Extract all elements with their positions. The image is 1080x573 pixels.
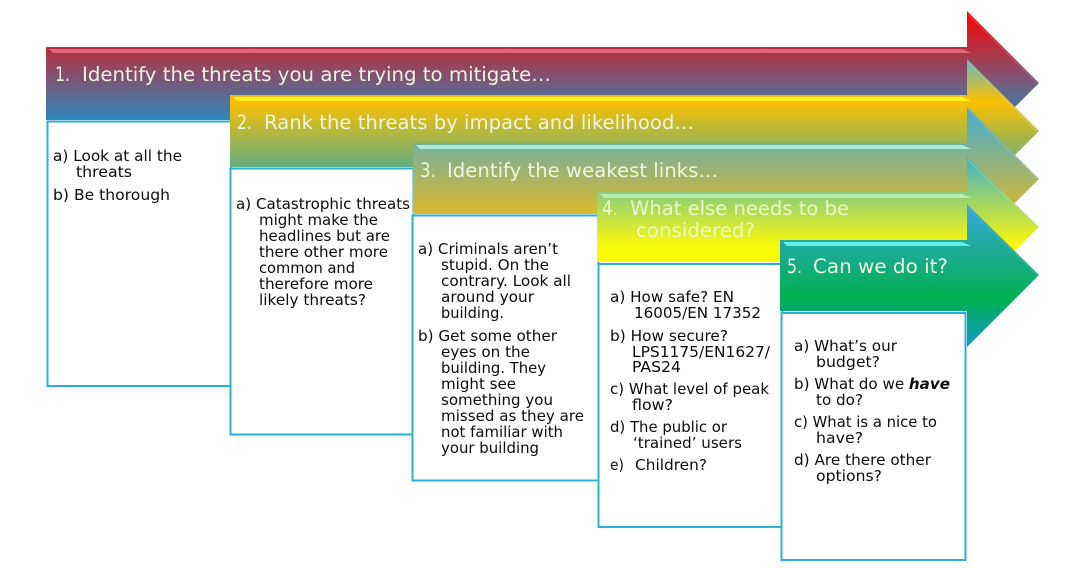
text: step 4 notes: LPS1175/EN1627/ [632, 343, 771, 361]
panel: step 1 notes [48, 122, 232, 386]
text: step 5 notes: options? [816, 467, 882, 485]
text: step 3 notes: b) Get some other [418, 327, 558, 345]
panel: step 3 notes [412, 216, 598, 480]
text: step 4 notes: PAS24 [632, 358, 681, 376]
heading: step 4: What else needs to be [630, 197, 849, 220]
heading: step 1: 1. [55, 63, 70, 86]
text: step 1 notes: threats [76, 163, 132, 181]
text: step 5 notes: c) What is a nice to [794, 413, 937, 431]
text: step 4 notes: d) The public or [610, 418, 728, 436]
heading: step 3: Identify the weakest links… [447, 159, 718, 182]
text: step 2 notes: therefore more [259, 275, 373, 293]
text: step 3 notes: eyes on the [441, 343, 530, 361]
step 5 [780, 204, 1039, 560]
text: step 4 notes: ‘trained’ users [633, 434, 742, 452]
text: step 3 notes: a) Criminals aren’t [418, 240, 558, 258]
heading: step 5: 5. [787, 255, 802, 278]
step 3 [412, 107, 1039, 480]
arrow: step 3 [413, 107, 1039, 251]
text: step 3 notes: missed as they are [441, 407, 584, 425]
arrow: step 5 [780, 204, 1039, 347]
text: step 1 notes: a) Look at all the [53, 147, 182, 165]
step 1 [46, 11, 1039, 386]
heading: step 4: considered? [636, 219, 755, 242]
text: step 1 notes: b) Be thorough [53, 186, 170, 204]
text: step 3 notes: might see [441, 375, 516, 393]
text: step 2 notes: there other more [259, 243, 388, 261]
step 4 [597, 157, 1039, 527]
text: step 4 notes: c) What level of peak [610, 380, 769, 398]
panel: step 4 notes [598, 264, 782, 527]
text: step 3 notes: around your [441, 288, 535, 306]
heading: step 3: 3. [420, 159, 436, 182]
text: step 5 notes: have? [816, 429, 863, 447]
panel: step 5 notes [782, 313, 966, 560]
arrow: step 4 [597, 157, 1039, 298]
text: step 3 notes: your building [441, 439, 539, 457]
text: step 2 notes: likely threats? [259, 291, 366, 309]
text: step 3 notes: something you [441, 391, 553, 409]
heading: step 4: 4. [602, 197, 618, 220]
text: step 3 notes [418, 240, 584, 457]
text: step 4 notes [610, 288, 771, 474]
text: step 3 notes: contrary. Look all [441, 272, 571, 290]
text: step 1 notes [53, 147, 182, 204]
text: step 5 notes: budget? [816, 353, 880, 371]
text: step 2 notes: a) Catastrophic threats [236, 195, 410, 213]
text: step 5 notes: b) What do we have [794, 375, 950, 393]
text: step 5 notes: d) Are there other [794, 451, 932, 469]
heading: step 5: Can we do it? [813, 255, 948, 278]
heading: step 1: Identify the threats you are trying to mitigate… [82, 63, 551, 86]
text: step 4 notes: Children? [635, 456, 707, 474]
text: step 4 notes: 16005/EN 17352 [634, 304, 761, 322]
text: step 2 notes: might make the [259, 211, 378, 229]
step 2 [230, 59, 1039, 434]
heading: step 2: Rank the threats by impact and likelihood… [264, 111, 694, 134]
text: step 3 notes: building. [441, 304, 504, 322]
text: step 4 notes: e) [610, 456, 624, 474]
text: step 3 notes: building. They [441, 359, 546, 377]
heading: step 2: 2. [237, 111, 252, 134]
text: step 5 notes [794, 337, 950, 485]
arrow: step 1 [46, 11, 1039, 155]
heading: step 4 [602, 197, 849, 242]
text: step 2 notes: common and [259, 259, 355, 277]
panel: step 2 notes [230, 168, 414, 434]
text: step 4 notes: b) How secure? [610, 327, 728, 345]
text: step 2 notes [236, 195, 410, 309]
text: step 5 notes: to do? [816, 391, 863, 409]
text: step 3 notes: not familiar with [441, 423, 563, 441]
text: step 4 notes: flow? [632, 396, 673, 414]
text: step 4 notes: a) How safe? EN [610, 288, 734, 306]
text: step 3 notes: stupid. On the [441, 256, 549, 274]
text: step 2 notes: headlines but are [259, 227, 390, 245]
text: step 5 notes: a) What’s our [794, 337, 898, 355]
arrow: step 2 [230, 59, 1039, 203]
